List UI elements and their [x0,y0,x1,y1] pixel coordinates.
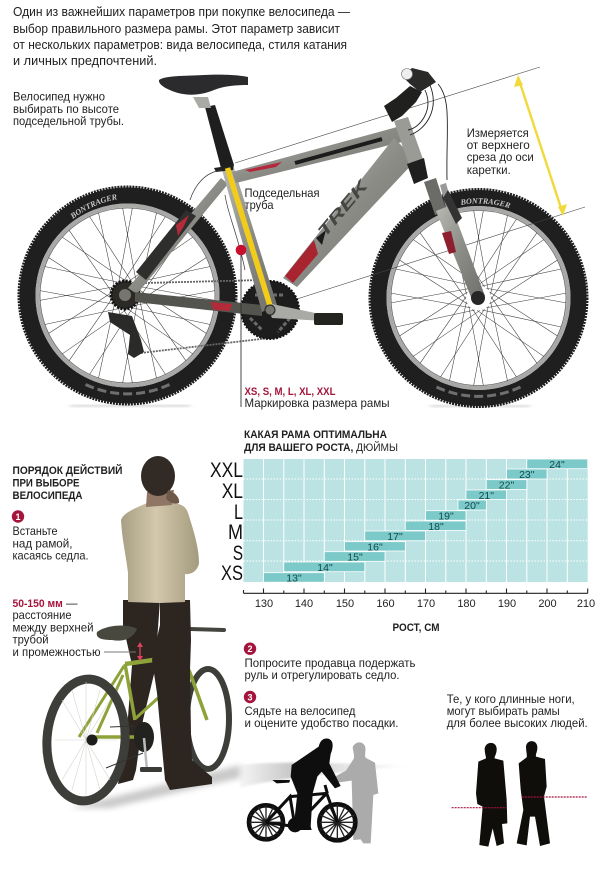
bar chart: frame size by height [244,459,588,584]
marker: frame size label pointer [236,245,246,407]
bar: 15 inch: 15" [347,552,363,564]
bar: 13 inch: 13" [286,572,302,584]
saddle [159,75,248,95]
frame size labels [210,457,243,585]
chart heading: КАКАЯ РАМА ОПТИМАЛЬНА [244,429,387,441]
head [141,456,179,507]
handlebar and stem [384,68,447,180]
note: choose by seat tube height: подседельной трубы. [13,114,124,128]
crank and pedal [265,304,343,325]
head tube and fork [394,117,485,305]
seat tube [222,168,277,312]
bar: 20 inch: 20" [464,500,480,512]
note: long legs: могут выбирать рамы [447,704,560,718]
intro text: от нескольких параметров: вида велосипеда, стиля катания [13,37,347,52]
plot background [244,459,588,582]
heading: order of actions: ПОРЯДОК ДЕЙСТВИЙ [12,464,123,477]
bar: 14 inch [284,562,365,574]
torso [121,499,199,603]
right leg [152,600,212,790]
handlebar [190,629,224,630]
step 2 [244,642,416,682]
heading: order of actions: ПРИ ВЫБОРЕ [12,478,80,490]
bar: 20 inch [458,500,486,512]
step 1: над рамой, [12,536,72,550]
front wheel [368,188,588,408]
front wheel: BONTRAGER [460,198,510,208]
bar: 23 inch: 23" [519,469,535,481]
step 3: 3 [247,692,253,702]
step 3: и оцените удобство посадки. [244,716,398,730]
frame size labels: XL [222,478,243,503]
yellow measurement arrow [514,75,567,216]
motion streak [240,763,413,787]
person with green bicycle [43,456,240,808]
step 3: Сядьте на велосипед [244,704,356,718]
frame size labels: S [233,540,243,565]
label: seat tube: Подседельная [244,186,320,200]
note: 50-150 mm clearance: между верхней [12,620,94,634]
intro text: выбор правильного размера рамы. Этот параметр зависит [13,21,340,36]
intro text: Один из важнейших параметров при покупке велосипеда — [13,4,350,19]
measuring lines [235,67,585,307]
axis title: РОСТ, СМ [392,622,440,634]
note: 50-150 mm clearance: 50-150 мм — [12,596,78,610]
bar: 16 inch: 16" [367,541,383,553]
height axis: 200 [538,598,557,610]
height axis [244,588,595,610]
bar: 24 inch [527,459,588,471]
note: 50-150 mm clearance [12,596,100,659]
bar: 18 inch [405,521,466,533]
step 1: 1 [15,512,21,522]
ground shadow [70,765,240,808]
drivetrain [108,280,299,358]
label: how it is measured [467,126,534,177]
rear triangle [128,178,262,316]
height axis: 150 [336,598,354,610]
frame size labels: XS [221,560,243,585]
step 1 [12,510,88,562]
label: frame size marking: XS, S, M, L, XL, XXL [244,386,336,398]
note: long legs: для более высоких людей. [447,716,588,730]
label: seat tube: труба [244,198,274,212]
note: long legs: Те, у кого длинные ноги, [447,692,575,706]
step 3 [244,691,398,730]
note: choose by seat tube height: выбирать по высоте [13,102,119,116]
step 2: руль и отрегулировать седло. [244,668,400,682]
leg length lines [452,797,587,808]
note: choose by seat tube height: Велосипед нужно [13,90,105,104]
back wheel fork [189,670,207,720]
bar: 19 inch: 19" [438,510,454,522]
heading: order of actions [12,464,123,502]
chart heading [244,429,398,454]
bar: 13 inch [264,572,324,584]
height axis: 130 [255,598,273,610]
chart heading: ДЛЯ ВАШЕГО РОСТА, ДЮЙМЫ [244,441,398,454]
note: 50-150 mm clearance: расстояние [12,608,72,622]
rear wheel: BONTRAGER [70,194,117,219]
note: long legs [447,692,588,730]
top tube [232,127,402,183]
height axis: 180 [457,598,476,610]
height axis: 190 [498,598,516,610]
seat stay cable [190,170,245,270]
rear wheel [18,186,238,406]
frame size labels: M [228,519,243,544]
left leg [118,600,160,784]
label: how it is measured: среза до оси [467,150,534,164]
bar: 15 inch [324,552,385,564]
drivetrain of green bicycle [86,722,162,772]
bar: 21 inch [466,490,506,502]
height axis: 210 [577,598,595,610]
man with briefcase [476,743,507,847]
frame size labels: XXL [210,457,243,482]
height axis: 160 [376,598,395,610]
intro text: и личных предпочтений. [13,53,157,68]
silhouette: two men with leg height lines [452,741,587,847]
down tube: TREK [315,176,373,241]
main bicycle illustration [18,66,588,408]
label: seat tube [244,186,320,212]
step 1: касаясь седла. [12,548,88,562]
front wheel [43,676,129,804]
bar: 22 inch [486,480,527,492]
note: 50-150 mm clearance: и промежностью [12,645,100,659]
bar: 18 inch: 18" [428,521,444,533]
bar: 21 inch: 21" [479,490,494,502]
leader and red double arrow [104,642,143,661]
intro text [13,4,350,68]
down tube [283,138,416,287]
bar: 14 inch: 14" [317,562,333,574]
label: how it is measured: каретки. [467,163,511,177]
back wheel [187,669,229,769]
note: choose by seat tube height [13,90,124,128]
height axis: 140 [295,598,313,610]
bar: 24 inch: 24" [549,459,565,471]
note: 50-150 mm clearance: трубой [12,632,48,646]
seat post [193,97,234,172]
saddle on green bicycle [97,626,137,641]
label: frame size marking: Маркировка размера рамы [244,396,390,410]
step 2: Попросите продавца подержать [244,656,416,670]
bar: 16 inch [344,541,405,553]
man with arms crossed [517,741,550,846]
seller [332,742,378,843]
seat tube yellow highlight [228,168,271,309]
bar: 19 inch [426,510,466,522]
bar: 22 inch: 22" [499,480,514,492]
label: how it is measured: Измеряется [467,126,529,140]
frame [79,660,158,737]
bar: 23 inch [506,469,547,481]
frame size labels: L [234,499,243,524]
step 1: Встаньте [12,524,58,538]
bar: 17 inch [365,531,426,543]
label: frame size marking [244,386,390,410]
bicycle and rider [249,738,355,840]
bar: 17 inch: 17" [387,531,403,543]
floor shadow [70,405,530,407]
heading: order of actions: ВЕЛОСИПЕДА [12,490,83,502]
silhouette: cyclist with seller [240,738,413,843]
label: how it is measured: от верхнего [467,138,530,152]
height axis: 170 [417,598,435,610]
step 2: 2 [247,644,253,654]
